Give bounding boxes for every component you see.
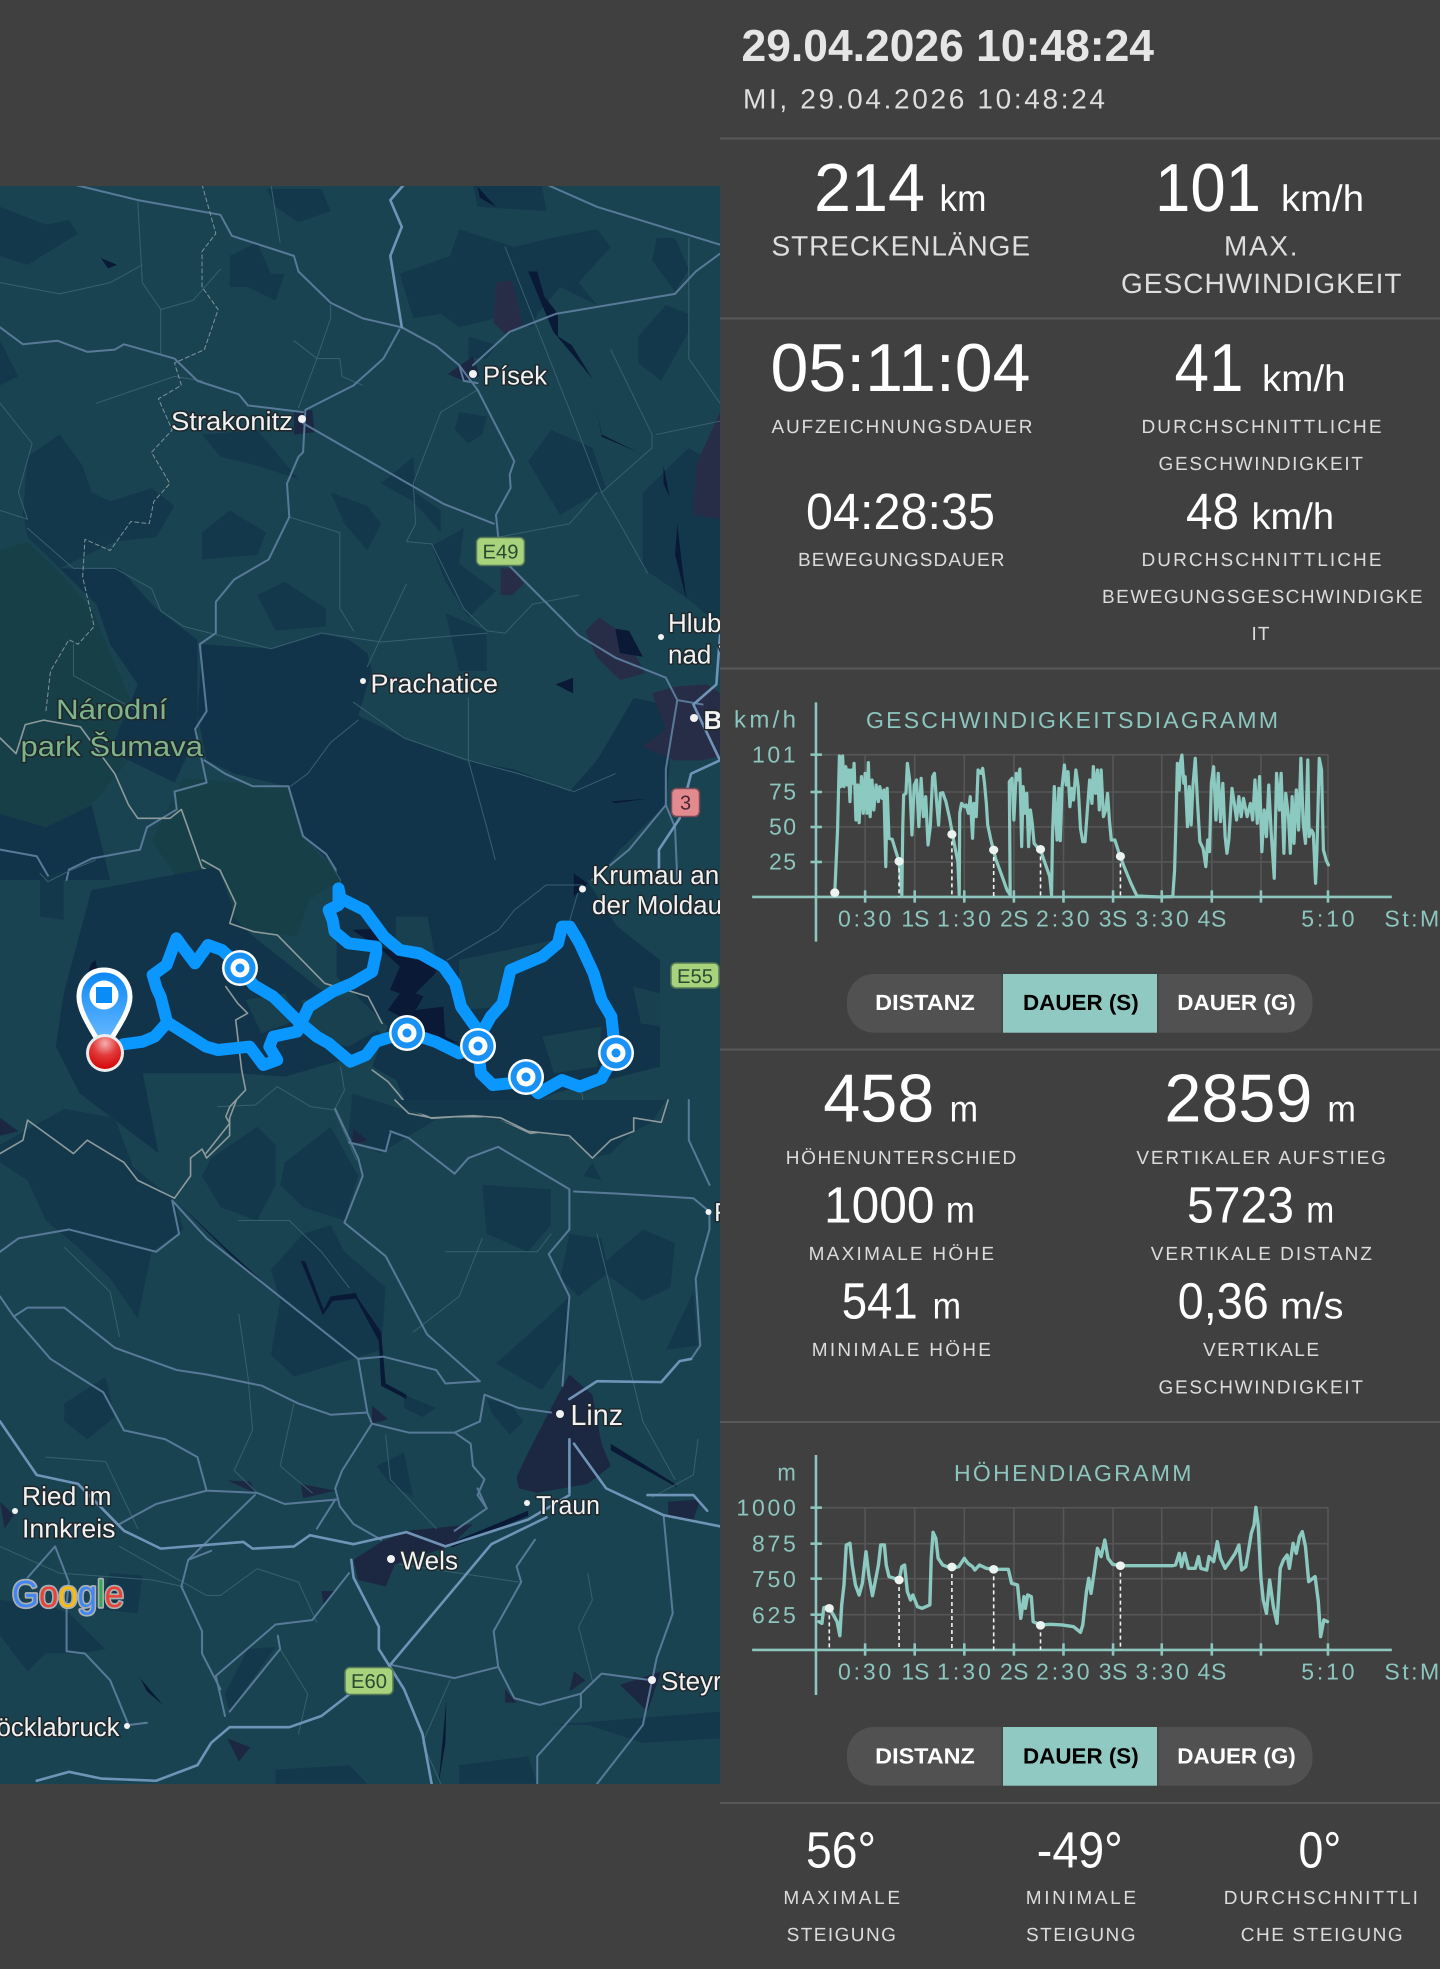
stat: recording duration bbox=[770, 330, 1032, 438]
x axis labels: 5:10 bbox=[1301, 906, 1354, 932]
x axis labels: 2:30 bbox=[1036, 906, 1090, 932]
map terrain: route area bbox=[40, 860, 660, 1160]
place labels: Hluboká bbox=[668, 608, 764, 638]
stat: average slope: CHE STEIGUNG bbox=[1241, 1925, 1403, 1946]
y axis unit and labels: 625 bbox=[752, 1602, 796, 1628]
y axis unit and labels: 50 bbox=[769, 814, 796, 840]
stat: maximum slope: STEIGUNG bbox=[787, 1925, 896, 1946]
place labels: Linz bbox=[570, 1400, 623, 1432]
stat: average speed: 41 bbox=[1174, 330, 1244, 406]
x axis labels: 3S bbox=[1099, 1659, 1127, 1685]
stat: maximum elevation: MAXIMALE HÖHE bbox=[809, 1244, 994, 1265]
toggle: elevation chart axis bbox=[847, 1727, 1312, 1786]
route line bbox=[123, 888, 615, 1093]
stat: average moving speed: DURCHSCHNITTLICHE bbox=[1142, 550, 1382, 571]
stat: average speed: DURCHSCHNITTLICHE bbox=[1142, 417, 1382, 438]
x axis labels: 4S bbox=[1198, 1659, 1226, 1685]
icon: start and end pin bbox=[79, 970, 130, 1072]
stat: moving duration: BEWEGUNGSDAUER bbox=[798, 550, 1004, 571]
section dividers bbox=[720, 138, 1440, 1804]
stat: vertical speed: GESCHWINDIGKEIT bbox=[1158, 1377, 1363, 1398]
stat: minimum slope bbox=[1026, 1821, 1136, 1946]
place labels: Steyr bbox=[661, 1666, 722, 1696]
place labels: Freistadt bbox=[714, 1197, 816, 1227]
x axis labels: 2S bbox=[1000, 906, 1028, 932]
x axis labels: 1S bbox=[901, 1659, 929, 1685]
x axis labels bbox=[838, 906, 1440, 932]
x axis labels: 3:30 bbox=[1136, 1659, 1189, 1685]
x axis labels: 4S bbox=[1198, 906, 1226, 932]
stat: vertical distance: m bbox=[1306, 1190, 1334, 1231]
stat: maximum slope bbox=[783, 1821, 900, 1946]
y axis unit and labels: 750 bbox=[752, 1566, 796, 1592]
stat: average slope: DURCHSCHNITTLI bbox=[1224, 1888, 1418, 1909]
place labels: Národní bbox=[56, 694, 168, 725]
stat: average moving speed: BEWEGUNGSGESCHWINDIGKE bbox=[1102, 587, 1422, 608]
toggle: speed chart axis: DAUER (G) bbox=[1177, 990, 1296, 1015]
stat: moving duration: 04:28:35 bbox=[806, 483, 995, 540]
stat: average slope: 0° bbox=[1298, 1821, 1341, 1878]
stat: average moving speed bbox=[1102, 483, 1422, 645]
stat: distance: 214 bbox=[814, 150, 925, 226]
y axis unit and labels: 101 bbox=[752, 742, 796, 768]
stat: average moving speed: 48 bbox=[1186, 483, 1239, 540]
place labels: Budweis bbox=[704, 705, 810, 735]
stat: minimum slope: MINIMALE bbox=[1026, 1888, 1136, 1909]
stat: average speed bbox=[1142, 330, 1382, 475]
stat: vertical ascent: VERTIKALER AUFSTIEG bbox=[1136, 1148, 1386, 1169]
stat: distance bbox=[772, 150, 1030, 262]
place labels: park Šumava bbox=[20, 731, 203, 762]
chart title: GESCHWINDIGKEITSDIAGRAMM bbox=[866, 707, 1278, 733]
stat: elevation difference bbox=[786, 1061, 1016, 1169]
stat: moving duration bbox=[798, 483, 1004, 571]
heading: date and time: 29.04.2026 10:48:24 bbox=[742, 20, 1154, 71]
toggle: elevation chart axis: DISTANZ bbox=[875, 1743, 975, 1768]
stat: vertical ascent: m bbox=[1327, 1089, 1356, 1130]
toggle: speed chart axis: DAUER (S) bbox=[1023, 990, 1139, 1015]
stat: average speed: km/h bbox=[1262, 358, 1346, 399]
stat: vertical distance: 5723 bbox=[1187, 1177, 1294, 1234]
stat: elevation difference: 458 bbox=[823, 1061, 934, 1137]
stat: average moving speed: km/h bbox=[1252, 496, 1334, 537]
x axis labels: 0:30 bbox=[838, 906, 891, 932]
x axis labels: 1S bbox=[901, 906, 929, 932]
x axis labels: 2:30 bbox=[1036, 1659, 1090, 1685]
x axis labels: 3:30 bbox=[1136, 906, 1189, 932]
stat: max speed: MAX. bbox=[1224, 231, 1298, 262]
map terrain: south section bbox=[0, 1100, 720, 1784]
chart title: HÖHENDIAGRAMM bbox=[954, 1460, 1191, 1486]
toggle: speed chart axis: DISTANZ bbox=[875, 990, 975, 1015]
place labels: Strakonitz bbox=[171, 406, 293, 436]
toggle: speed chart axis bbox=[847, 974, 1312, 1033]
stat: vertical ascent bbox=[1136, 1061, 1386, 1169]
toggle: elevation chart axis: DAUER (S) bbox=[1023, 1743, 1139, 1768]
stat: maximum elevation: 1000 bbox=[824, 1177, 934, 1234]
stat: elevation difference: HÖHENUNTERSCHIED bbox=[786, 1148, 1016, 1169]
y axis unit and labels: 25 bbox=[769, 849, 796, 875]
y axis unit and labels bbox=[734, 707, 796, 875]
chart: elevation diagram bbox=[736, 1455, 1440, 1695]
stat: vertical speed: m/s bbox=[1280, 1286, 1344, 1327]
place labels: Innkreis bbox=[22, 1514, 116, 1544]
stat: maximum slope: MAXIMALE bbox=[783, 1888, 900, 1909]
road shields bbox=[345, 538, 719, 1694]
y axis unit and labels: 75 bbox=[769, 778, 796, 804]
stat: average moving speed: IT bbox=[1252, 624, 1270, 645]
stat: max speed: 101 bbox=[1155, 150, 1261, 226]
x axis labels: 5:10 bbox=[1301, 1659, 1354, 1685]
heading: date and time bbox=[742, 20, 1154, 115]
logo: Google: Google bbox=[12, 1574, 124, 1616]
place labels: Písek bbox=[483, 360, 548, 390]
place labels: der Moldau bbox=[592, 890, 722, 920]
stat: vertical speed: 0,36 bbox=[1178, 1273, 1269, 1330]
route waypoint markers bbox=[222, 950, 634, 1095]
stat: elevation difference: m bbox=[950, 1089, 978, 1130]
heading: date and time: MI, 29.04.2026 10:48:24 bbox=[743, 84, 1105, 115]
stat: maximum elevation bbox=[809, 1177, 994, 1265]
stat: distance: STRECKENLÄNGE bbox=[772, 231, 1030, 262]
place labels: Ried im bbox=[22, 1481, 112, 1511]
stat: average slope bbox=[1224, 1821, 1418, 1946]
stat: minimum elevation: 541 bbox=[842, 1273, 918, 1330]
panel: statistics background bbox=[720, 0, 1440, 1969]
stat: vertical speed bbox=[1158, 1273, 1363, 1398]
stat: vertical distance bbox=[1151, 1177, 1372, 1265]
y axis unit and labels: m bbox=[777, 1460, 796, 1487]
stat: max speed bbox=[1121, 150, 1402, 299]
stat: recording duration: 05:11:04 bbox=[770, 330, 1030, 406]
stat: vertical speed: VERTIKALE bbox=[1203, 1340, 1319, 1361]
x axis labels: 2S bbox=[1000, 1659, 1028, 1685]
y axis unit and labels: km/h bbox=[734, 707, 796, 734]
x axis labels: 1:30 bbox=[937, 906, 991, 932]
place labels: Prachatice bbox=[370, 668, 498, 698]
stat: max speed: km/h bbox=[1281, 178, 1364, 219]
stat: recording duration: AUFZEICHNUNGSDAUER bbox=[772, 417, 1032, 438]
panel: route map bbox=[0, 186, 720, 1784]
x axis labels bbox=[838, 1659, 1440, 1685]
stat: vertical ascent: 2859 bbox=[1164, 1061, 1312, 1137]
y axis unit and labels bbox=[736, 1460, 796, 1628]
place labels: Krumau an bbox=[592, 860, 719, 890]
stat: minimum elevation: MINIMALE HÖHE bbox=[812, 1340, 991, 1361]
stat: vertical distance: VERTIKALE DISTANZ bbox=[1151, 1244, 1372, 1265]
place labels: Traun bbox=[536, 1490, 600, 1520]
stat: minimum elevation: m bbox=[933, 1286, 961, 1327]
y axis unit and labels: 1000 bbox=[736, 1495, 796, 1521]
x axis labels: 0:30 bbox=[838, 1659, 891, 1685]
plot lines and axes bbox=[752, 1455, 1392, 1695]
stat: minimum slope: -49° bbox=[1037, 1821, 1123, 1878]
road shields: E55 bbox=[677, 966, 713, 988]
stat: minimum elevation bbox=[812, 1273, 991, 1361]
stat: maximum slope: 56° bbox=[806, 1821, 876, 1878]
stat: distance: km bbox=[940, 178, 986, 219]
place labels: Wels bbox=[400, 1546, 458, 1576]
stat: average speed: GESCHWINDIGKEIT bbox=[1158, 454, 1363, 475]
road shields: E60 bbox=[351, 1671, 387, 1693]
map terrain: north section bbox=[0, 184, 720, 880]
toggle: elevation chart axis: DAUER (G) bbox=[1177, 1743, 1296, 1768]
place labels bbox=[0, 364, 720, 1738]
place labels: nad Vltavou bbox=[668, 640, 805, 670]
road shields: 3 bbox=[680, 792, 691, 814]
road shields: E49 bbox=[482, 542, 518, 564]
stat: max speed: GESCHWINDIGKEIT bbox=[1121, 268, 1402, 299]
y axis unit and labels: 875 bbox=[752, 1531, 796, 1557]
x axis labels: 1:30 bbox=[937, 1659, 991, 1685]
plot lines and axes bbox=[752, 702, 1392, 942]
stat: minimum slope: STEIGUNG bbox=[1026, 1925, 1136, 1946]
chart: speed diagram bbox=[734, 702, 1440, 942]
x axis labels: 3S bbox=[1099, 906, 1127, 932]
stat: maximum elevation: m bbox=[946, 1190, 975, 1231]
